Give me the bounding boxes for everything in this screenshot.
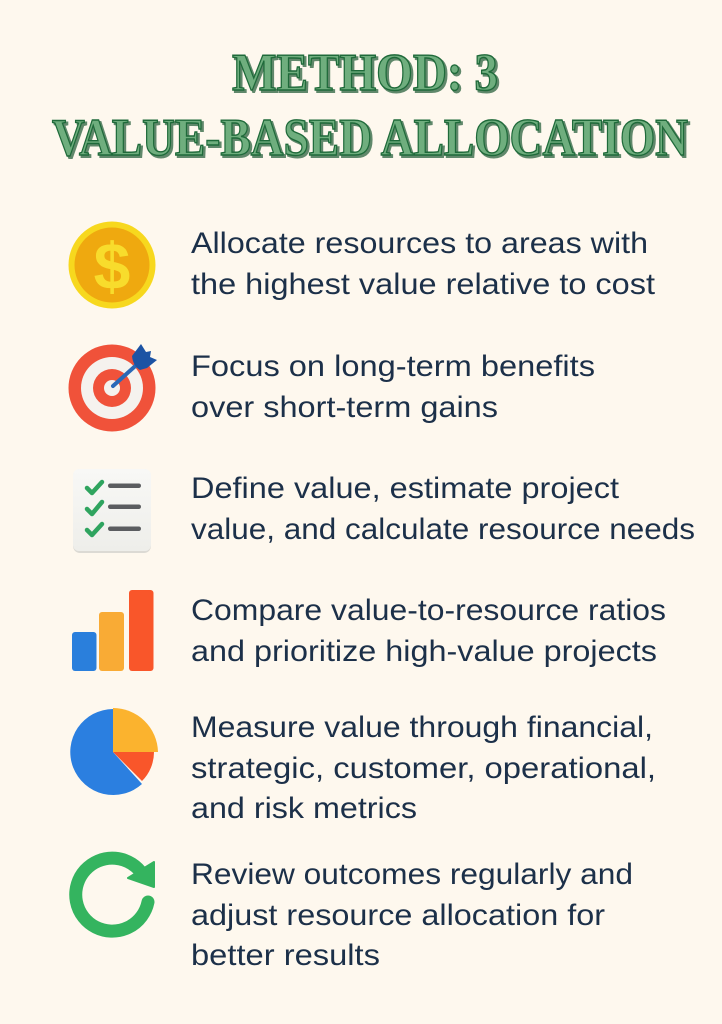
title: METHOD: 3 xyxy=(234,46,500,104)
title xyxy=(52,44,690,169)
icon: target with dart xyxy=(68,344,157,432)
text: long-term benefits: over short-term gains xyxy=(191,391,498,424)
text: define value xyxy=(191,472,695,546)
title: METHOD: 3 xyxy=(232,44,498,102)
text: review outcomes: better results xyxy=(191,939,380,972)
text: review outcomes xyxy=(191,858,633,972)
text: long-term benefits xyxy=(191,350,595,424)
text: define value: Define value, estimate project xyxy=(191,472,620,505)
text: review outcomes: adjust resource allocation for xyxy=(191,899,605,932)
text: compare ratios xyxy=(191,594,666,668)
text: allocate resources xyxy=(191,227,656,301)
text: compare ratios: Compare value-to-resource ratios xyxy=(191,594,666,627)
icon: refresh arrow xyxy=(76,858,154,931)
text: allocate resources: the highest value relative to cost xyxy=(191,268,656,301)
text: allocate resources: Allocate resources to areas with xyxy=(191,227,648,260)
icon: pie chart xyxy=(70,708,158,795)
text: measure value: and risk metrics xyxy=(191,792,417,825)
text: long-term benefits: Focus on long-term benefits xyxy=(191,350,595,383)
text: define value: value, and calculate resource needs xyxy=(191,513,695,546)
text: compare ratios: and prioritize high-value projects xyxy=(191,635,657,668)
icon: bar chart xyxy=(72,590,154,671)
text: measure value xyxy=(191,711,656,825)
icon: checklist xyxy=(73,469,151,553)
icon: dollar coin: $ xyxy=(94,229,130,303)
text: measure value: Measure value through financial, xyxy=(191,711,653,744)
icon: dollar coin xyxy=(68,222,156,308)
text: review outcomes: Review outcomes regularly and xyxy=(191,858,633,891)
text: measure value: strategic, customer, operational, xyxy=(191,752,656,785)
